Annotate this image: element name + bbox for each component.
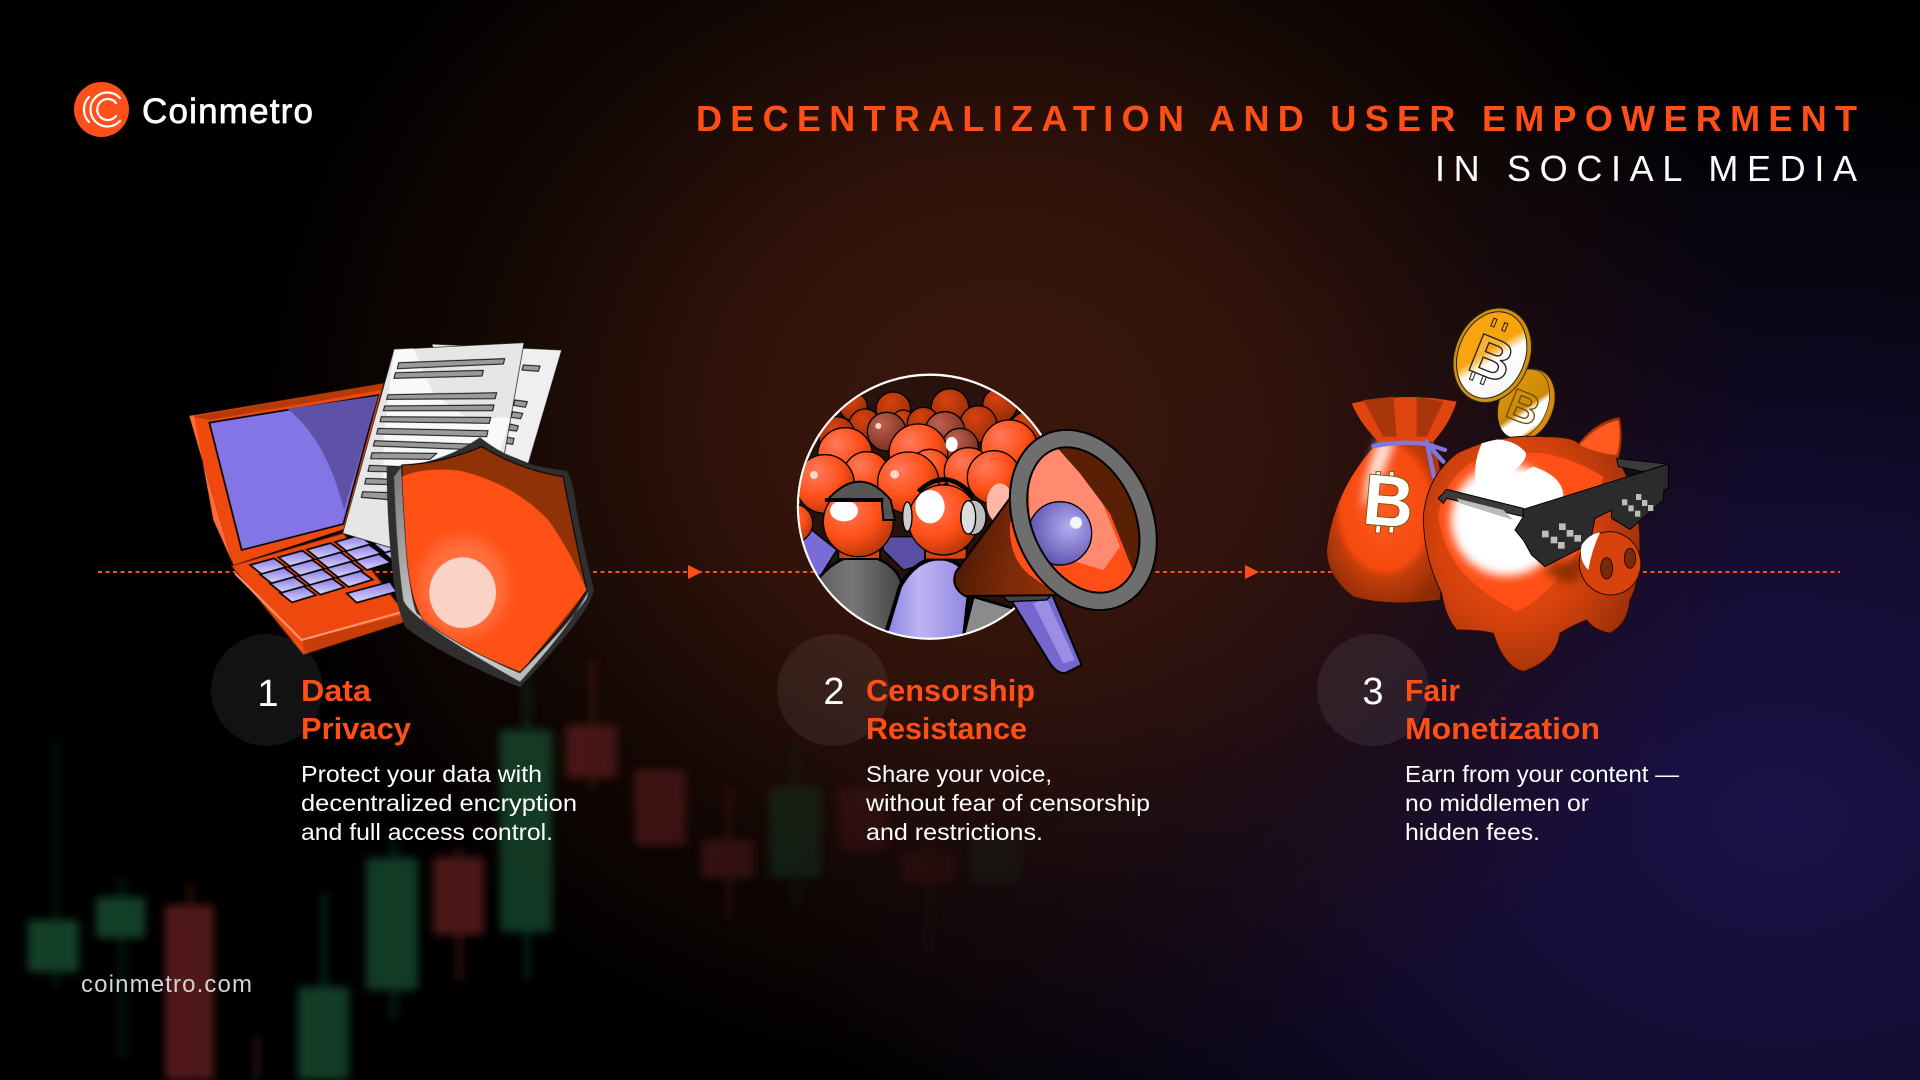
purple back bodies <box>800 527 837 578</box>
heading 3: Fair <box>1405 673 1460 708</box>
description 3: no middlemen or <box>1405 790 1589 816</box>
description 1: decentralized encryption <box>301 790 577 816</box>
description 2: without fear of censorship <box>865 790 1150 816</box>
piggy bank <box>1423 417 1668 672</box>
description 1: Protect your data with <box>301 761 542 787</box>
crowd in circle <box>796 374 1042 640</box>
heading 3: Monetization <box>1405 711 1600 746</box>
footer url: coinmetro.com <box>81 971 252 998</box>
number badge 2 <box>777 634 889 746</box>
number badge 1 <box>211 634 323 746</box>
illustration: crowd and megaphone <box>774 375 1173 673</box>
heading 2: Censorship <box>866 673 1035 708</box>
document front sheet <box>343 343 524 553</box>
mauve heads <box>866 411 979 458</box>
money bag <box>1327 397 1457 603</box>
middle row heads <box>787 420 1038 513</box>
back coin <box>1487 360 1565 450</box>
megaphone bell interior <box>1028 448 1138 592</box>
heading 1: Data <box>301 673 372 708</box>
description 2: Share your voice, <box>866 761 1052 787</box>
title <box>696 98 1857 189</box>
number badge 1: 1 <box>257 673 279 715</box>
step 1: Data Privacy <box>211 634 577 845</box>
logo wordmark: Coinmetro <box>142 92 313 131</box>
front coin: B <box>1461 322 1522 396</box>
illustration: laptop, documents and shield <box>189 343 594 687</box>
heading 1: Privacy <box>301 711 412 746</box>
megaphone ring <box>994 418 1173 622</box>
megaphone cone <box>954 487 1072 596</box>
logo: Coinmetro <box>74 82 313 137</box>
blurred candlestick chart background <box>28 660 1021 1080</box>
logo mark <box>74 82 129 137</box>
laptop base <box>232 528 419 654</box>
step 2: Censorship Resistance <box>777 634 1150 845</box>
description 3: Earn from your content — <box>1405 761 1680 787</box>
shield <box>387 437 594 687</box>
heading 2: Resistance <box>866 711 1027 746</box>
snout <box>1571 524 1649 603</box>
back row heads <box>818 388 1040 443</box>
number badge 2: 2 <box>823 671 845 713</box>
sunglasses <box>1438 458 1668 567</box>
number badge 3: 3 <box>1362 671 1384 713</box>
megaphone handle <box>1010 593 1082 673</box>
megaphone <box>953 428 1158 674</box>
left person <box>799 480 902 631</box>
right person <box>885 477 1014 638</box>
laptop lid <box>189 383 383 565</box>
bitcoin symbol on bag: B <box>1360 460 1417 544</box>
description 2: and restrictions. <box>866 819 1043 845</box>
illustration: money bag, coins and piggy bank <box>1327 296 1668 672</box>
description 3: hidden fees. <box>1405 819 1540 845</box>
back coin: B <box>1500 380 1547 436</box>
title line 2: IN SOCIAL MEDIA <box>1435 148 1857 189</box>
title line 1: DECENTRALIZATION AND USER EMPOWERMENT <box>696 98 1857 139</box>
document back sheet <box>432 344 562 463</box>
front coin <box>1439 296 1545 414</box>
dotted timeline with arrows <box>98 565 1840 579</box>
description 1: and full access control. <box>301 819 553 845</box>
step 3: Fair Monetization <box>1317 634 1680 845</box>
number badge 3 <box>1317 634 1429 746</box>
